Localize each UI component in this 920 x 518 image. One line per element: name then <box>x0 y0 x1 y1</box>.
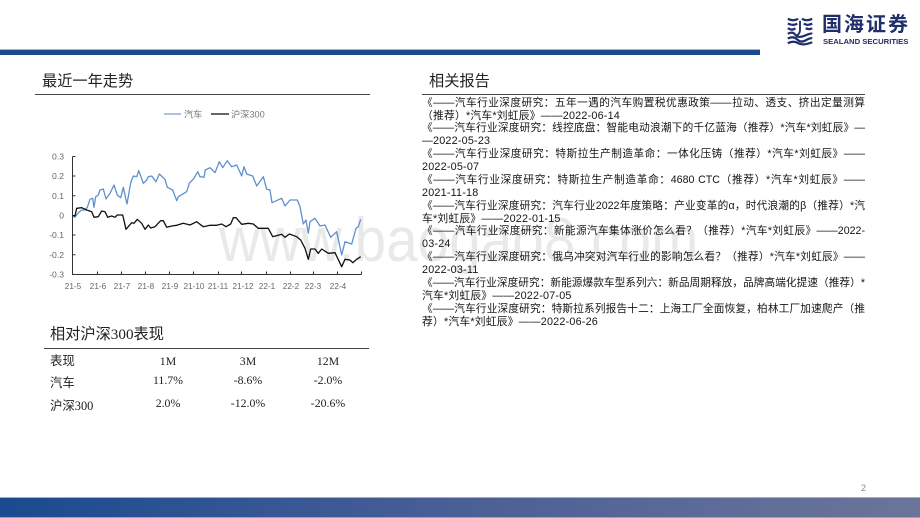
table header row: 12M <box>317 354 339 368</box>
y axis labels: -0.1 <box>49 230 64 240</box>
x axis labels: 21-7 <box>114 282 131 291</box>
report list: 车*刘虹辰》——2022-01-15 <box>422 213 561 225</box>
report list: 《——汽车行业深度研究：俄乌冲突对汽车行业的影响怎么看？（推荐）*汽车*刘虹辰》—— <box>422 251 865 263</box>
report list: 《——汽车行业深度研究：汽车行业2022年度策略：产业变革的α，时代浪潮的β（推荐）*汽 <box>422 200 865 212</box>
report list: 《——汽车行业深度研究：特斯拉系列报告十二：上海工厂全面恢复，柏林工厂加速爬产（推 <box>422 303 865 315</box>
report list: 《——汽车行业深度研究：五年一遇的汽车购置税优惠政策——拉动、透支、挤出定量测算 <box>422 97 865 109</box>
chart legend: 沪深300 <box>231 108 265 120</box>
report list <box>422 96 866 328</box>
table row: auto: 汽车 <box>50 376 75 390</box>
chart legend: 汽车 <box>184 108 202 120</box>
x axis labels <box>65 282 347 291</box>
report list: 2021-11-18 <box>422 187 478 199</box>
heading: related reports: 相关报告 <box>429 73 490 90</box>
y axis labels: -0.2 <box>49 250 64 260</box>
table row: auto: -8.6% <box>234 373 262 387</box>
report list: （推荐）*汽车*刘虹辰》——2022-06-14 <box>422 110 620 122</box>
footer bar <box>0 497 920 518</box>
page number: 2 <box>861 483 866 493</box>
x axis labels: 21-9 <box>162 282 179 291</box>
x axis labels: 22-4 <box>330 282 347 291</box>
logo: Sealand Securities <box>787 14 910 46</box>
table header row: 1M <box>160 354 176 368</box>
report list: 2022-05-07 <box>422 161 479 173</box>
report list: 《——汽车行业深度研究：新能源爆款车型系列六：新品周期释放，品牌高端化提速（推荐）* <box>422 277 865 289</box>
table header row: 表现 <box>50 354 75 368</box>
heading: relative performance: 相对沪深300表现 <box>50 326 164 343</box>
chart legend <box>164 108 265 120</box>
x axis labels: 21-8 <box>138 282 155 291</box>
heading: trend: 最近一年走势 <box>42 73 133 90</box>
report list: 《——汽车行业深度研究：特斯拉生产制造革命：4680 CTC（推荐）*汽车*刘虹辰》—— <box>422 174 865 186</box>
x axis labels: 21-6 <box>90 282 107 291</box>
report list: —2022-05-23 <box>422 135 490 147</box>
table header row: 3M <box>240 354 256 368</box>
report list: 《——汽车行业深度研究：特斯拉生产制造革命：一体化压铸（推荐）*汽车*刘虹辰》—— <box>422 148 865 160</box>
report list: 汽车*刘虹辰》——2022-07-05 <box>422 290 572 302</box>
table row: CSI 300 <box>50 396 345 413</box>
table row: auto: 11.7% <box>153 373 183 387</box>
table row: CSI 300: 沪深300 <box>50 399 93 413</box>
series: auto (blue) <box>73 161 361 255</box>
y axis labels: 0.3 <box>52 152 64 162</box>
panel: relative performance vs CSI 300 <box>44 326 369 413</box>
x axis labels: 22-2 <box>283 282 300 291</box>
y axis labels: 0.2 <box>52 171 64 181</box>
table row: CSI 300: -12.0% <box>231 396 265 410</box>
logo English name: SEALAND SECURITIES <box>823 37 908 46</box>
x axis labels: 21-10 <box>184 282 205 291</box>
x axis labels: 21-5 <box>65 282 82 291</box>
table row: CSI 300: -20.6% <box>311 396 345 410</box>
header bar <box>0 49 760 55</box>
x axis labels: 22-3 <box>305 282 322 291</box>
y axis labels: 0.1 <box>52 191 64 201</box>
report list: 03-24 <box>422 238 451 250</box>
watermark: www.baogao8.com <box>219 206 698 275</box>
y axis labels <box>49 152 64 280</box>
table row: auto <box>50 373 342 390</box>
series: CSI 300 (black) <box>73 208 361 267</box>
icon: waves emblem <box>787 18 813 46</box>
y axis labels: 0 <box>59 210 64 220</box>
report list: 荐）*汽车*刘虹辰》——2022-06-26 <box>422 316 598 328</box>
x axis labels: 21-12 <box>233 282 254 291</box>
report list: 《——汽车行业深度研究：新能源汽车集体涨价怎么看？（推荐）*汽车*刘虹辰》——2022- <box>422 225 865 237</box>
table row: auto: -2.0% <box>314 373 342 387</box>
table header row <box>50 354 339 368</box>
report list: 《——汽车行业深度研究：线控底盘：智能电动浪潮下的千亿蓝海（推荐）*汽车*刘虹辰》— <box>422 122 865 134</box>
logo wordmark: 国海证券 <box>822 14 910 36</box>
x axis labels: 22-1 <box>259 282 276 291</box>
chart axes <box>72 156 362 274</box>
y axis labels: -0.3 <box>49 270 64 280</box>
report list: 2022-03-11 <box>422 264 478 276</box>
table row: CSI 300: 2.0% <box>156 396 180 410</box>
x axis labels: 21-11 <box>208 282 229 291</box>
